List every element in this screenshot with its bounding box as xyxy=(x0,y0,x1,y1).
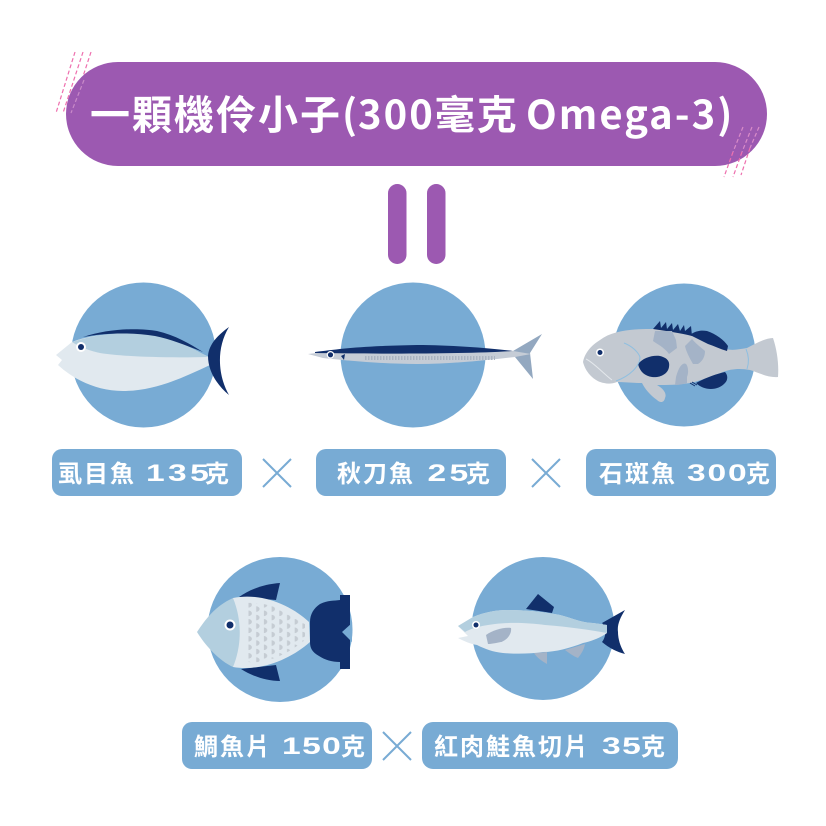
label: saury: 克 xyxy=(466,454,492,489)
multiply sign 2 xyxy=(532,459,560,487)
label: salmon xyxy=(422,722,678,769)
icon: saury xyxy=(308,334,542,379)
panel: saury xyxy=(308,282,542,496)
icon: grouper xyxy=(583,321,778,402)
icon: salmon xyxy=(458,594,625,664)
label: saury: 25 xyxy=(428,460,472,487)
title text: Omega-3) xyxy=(526,83,734,141)
label: milkfish: 135 xyxy=(146,460,212,487)
icon: sea bream xyxy=(197,583,352,681)
panel: grouper xyxy=(583,284,778,496)
label: sea bream xyxy=(182,722,372,769)
equals sign xyxy=(388,184,446,264)
label: grouper: 克 xyxy=(746,454,772,489)
panel: milkfish xyxy=(52,282,242,496)
label: salmon: 紅肉鮭魚切片 xyxy=(434,727,590,762)
panel: salmon xyxy=(422,557,678,769)
multiply sign 1 xyxy=(263,459,291,487)
title text: 一顆機伶小子( xyxy=(90,83,359,141)
label: sea bream: 克 xyxy=(341,727,367,762)
icon: milkfish xyxy=(56,327,229,395)
label: milkfish xyxy=(52,449,242,496)
label: milkfish: 虱目魚 xyxy=(58,454,136,489)
title banner xyxy=(66,62,767,177)
label: salmon: 35 xyxy=(602,733,642,760)
label: milkfish: 克 xyxy=(205,454,231,489)
label: saury xyxy=(316,449,506,496)
label: saury: 秋刀魚 xyxy=(337,454,415,489)
label: grouper: 300 xyxy=(687,460,749,487)
label: grouper xyxy=(586,449,776,496)
label: grouper: 石斑魚 xyxy=(599,454,677,489)
decorative pink dashes, top left xyxy=(56,52,91,113)
label: sea bream: 150 xyxy=(282,733,342,760)
title text: 300毫克 xyxy=(358,83,519,141)
label: salmon: 克 xyxy=(641,727,667,762)
multiply sign 3 xyxy=(383,732,411,760)
label: sea bream: 鯛魚片 xyxy=(194,727,272,762)
panel: sea bream xyxy=(182,557,372,769)
